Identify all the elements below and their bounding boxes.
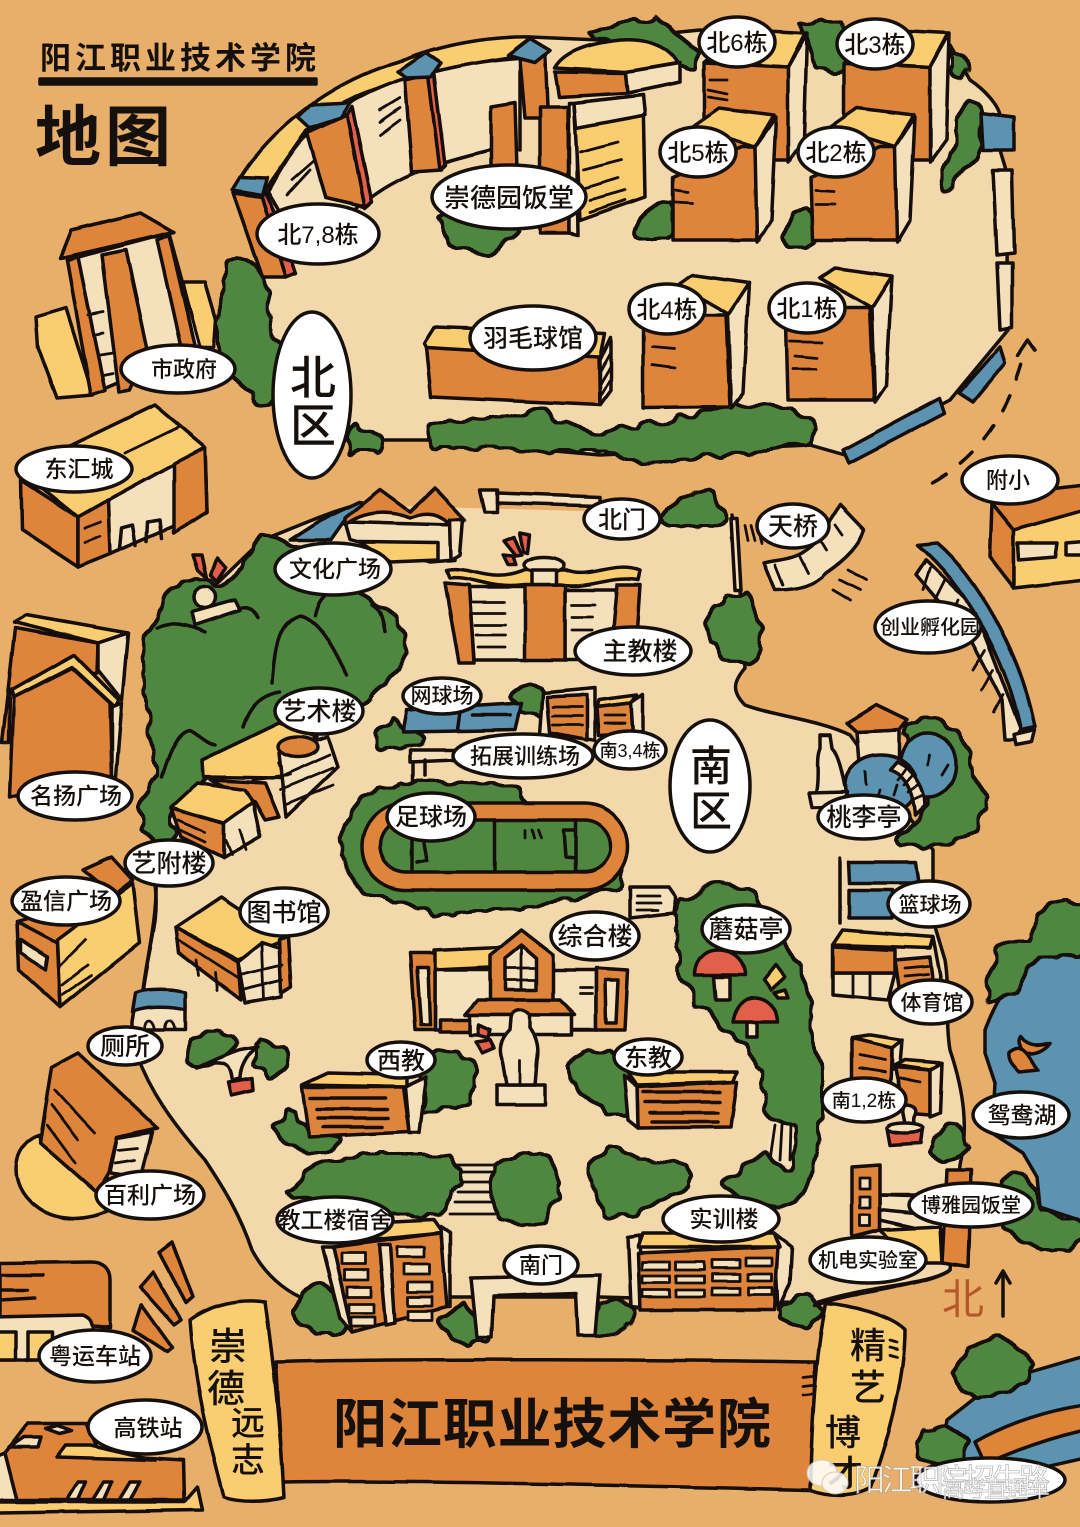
training building [628, 1233, 792, 1310]
label: 名扬广场 [18, 772, 132, 820]
label: 图书馆: 图书馆 [246, 899, 322, 927]
label: 东汇城: 东汇城 [44, 456, 114, 482]
bush: left of north 2 [778, 208, 816, 248]
label: 崇德园饭堂 [432, 165, 586, 229]
Yingxin plaza [17, 857, 140, 1007]
bush: right of north 3 [950, 47, 973, 80]
mushroom pavilions [695, 950, 788, 1037]
watermark: 阳江职院招生路 [854, 1463, 1050, 1498]
sign text: 远志: 远 [231, 1405, 265, 1443]
bush: east classroom [568, 1048, 630, 1117]
title: 阳江职业技术学院 [40, 41, 316, 76]
watermark: 高考直通车 [942, 1476, 1050, 1502]
label: 南区: 南 [690, 743, 732, 790]
main teaching building [445, 533, 640, 663]
dashed arrow to primary school [933, 357, 1023, 483]
label: 北7,8栋: 北7,8栋 [277, 222, 359, 249]
label: 北4栋: 北4栋 [636, 297, 698, 324]
label: 北1栋: 北1栋 [776, 296, 838, 323]
sign text: 博才: 才 [827, 1453, 863, 1494]
bush: mushroom pavilion grove [673, 880, 821, 1207]
arrow head [1018, 340, 1035, 355]
label: 厕所 [88, 1027, 162, 1065]
road west edge stub [143, 885, 156, 990]
wechat icon [807, 1460, 848, 1494]
tree and pot left [197, 1047, 258, 1095]
tower D [508, 38, 550, 118]
label: 北区: 北 [290, 352, 336, 404]
label: 北区 [273, 312, 351, 478]
canteen block rear [555, 40, 680, 97]
label: 南门 [504, 1246, 578, 1284]
label: 文化广场 [275, 543, 391, 595]
label: 足球场: 足球场 [395, 804, 467, 831]
label: 北1栋 [769, 283, 845, 333]
label: 西教: 西教 [377, 1048, 425, 1075]
label: 教工楼宿舍 [277, 1197, 393, 1243]
general building [410, 930, 628, 1035]
sign text: 精艺 [850, 1325, 886, 1408]
bush: below canteen [438, 213, 517, 257]
canteen block front [574, 95, 645, 220]
north arrow [942, 1271, 1010, 1323]
label: 百利广场: 百利广场 [104, 1182, 196, 1208]
label: 实训楼 [663, 1196, 779, 1242]
north campus ground [240, 30, 1008, 455]
label: 主教楼 [575, 627, 691, 675]
Donghui city [20, 405, 207, 567]
lake: 鸳鸯湖 [985, 953, 1080, 1222]
label: 北7,8栋 [257, 204, 379, 264]
dorm: north 3 [844, 30, 949, 162]
label: 体育馆 [890, 980, 972, 1024]
bush: west classroom right [424, 1048, 479, 1113]
road barriers north-east [843, 113, 1014, 463]
label: 北2栋 [798, 127, 874, 177]
sign text: 精艺: 艺 [850, 1367, 886, 1408]
south gate [471, 1275, 600, 1337]
label: 创业孵化园: 创业孵化园 [880, 616, 980, 639]
label: 羽毛球馆 [470, 306, 596, 370]
sign text: 远志: 志 [231, 1442, 265, 1480]
small block near field [630, 887, 676, 918]
staff dorm [322, 1220, 450, 1332]
incubation park [916, 543, 1035, 745]
bush: long south of badminton [426, 411, 604, 452]
label: 综合楼 [551, 912, 639, 960]
label: 体育馆: 体育馆 [900, 992, 964, 1015]
label: 鸳鸯湖: 鸳鸯湖 [988, 1102, 1056, 1128]
bush: north-west [215, 258, 285, 410]
label: 天桥: 天桥 [768, 513, 818, 541]
bush: left of canteen [930, 1123, 968, 1163]
label: bottom-right hidden ellipse [915, 1458, 1065, 1502]
label: 足球场 [387, 793, 475, 841]
label: 南3,4栋: 南3,4栋 [599, 741, 661, 761]
hill with trees [141, 533, 409, 847]
sign text: 博才: 博 [825, 1412, 861, 1453]
tennis court [403, 703, 521, 732]
label: 东汇城 [16, 446, 132, 492]
library [176, 897, 291, 1003]
training bench [410, 750, 455, 780]
sign text: 崇德 [207, 1327, 247, 1411]
label: 名扬广场: 名扬广场 [30, 783, 122, 809]
steps south [450, 1165, 505, 1214]
bush: tennis left [376, 718, 428, 750]
Baili plaza [16, 1053, 157, 1218]
bush: south of overpass road [705, 593, 761, 667]
art annex [171, 783, 260, 858]
label: 艺附楼: 艺附楼 [131, 850, 207, 878]
bush: south right [588, 1147, 693, 1220]
label: 盈信广场 [12, 877, 120, 925]
bush: pavilion rear [902, 715, 976, 800]
north gate [480, 490, 741, 590]
lakes [940, 953, 1080, 1475]
label: 艺附楼 [125, 840, 213, 886]
watermark [807, 1460, 1050, 1502]
label: 艺术楼: 艺术楼 [281, 698, 357, 726]
ducks on lake [1009, 1037, 1050, 1072]
primary school [990, 485, 1080, 588]
label: 机电实验室: 机电实验室 [818, 1249, 918, 1272]
bush: right of training [778, 1293, 824, 1328]
label: 北3栋: 北3栋 [844, 32, 906, 59]
label: 实训楼: 实训楼 [690, 1206, 758, 1232]
bush: south long left [286, 1155, 462, 1215]
label: 文化广场: 文化广场 [289, 556, 381, 582]
banner base [276, 1360, 815, 1490]
label: 机电实验室 [810, 1237, 926, 1283]
canteen towers [491, 103, 578, 235]
heading: map: 地图 [35, 100, 171, 174]
label: 高铁站: 高铁站 [114, 1415, 182, 1441]
label: 附小: 附小 [986, 468, 1030, 493]
south 3,4 blocks [540, 688, 643, 740]
bush: left of staff dorm [291, 1282, 348, 1338]
orange bridge over pond [975, 1405, 1080, 1464]
bush: north gate [658, 490, 728, 527]
label: 南门: 南门 [519, 1253, 563, 1278]
label: 高铁站 [88, 1400, 202, 1454]
bush: left of north 5 [630, 200, 673, 238]
label: 博雅园饭堂 [909, 1183, 1033, 1227]
bush: long south of north 4 [605, 405, 816, 463]
toilet block [132, 989, 185, 1030]
label: 北2栋: 北2栋 [805, 140, 867, 167]
label: 北5栋 [660, 127, 736, 177]
culture plaza tent [290, 488, 465, 562]
left stone sign [190, 1301, 284, 1501]
north dorm arc band [240, 37, 530, 230]
label: 市政府 [121, 345, 235, 393]
bush: between north 6 and 3 [797, 23, 843, 73]
road to lab [815, 1270, 950, 1305]
label: 篮球场: 篮球场 [898, 894, 962, 917]
sign text: 崇德: 崇 [209, 1327, 247, 1369]
bush: south centre [490, 1150, 557, 1227]
green-side steps [764, 1120, 800, 1165]
label: 拓展训练场: 拓展训练场 [470, 744, 580, 769]
label: 博雅园饭堂: 博雅园饭堂 [921, 1194, 1021, 1217]
label: 主教楼: 主教楼 [602, 638, 678, 666]
scholar statue [809, 735, 847, 808]
label: 教工楼宿舍: 教工楼宿舍 [278, 1207, 392, 1233]
label: 北3栋 [837, 19, 913, 69]
sign text: 博才 [825, 1412, 863, 1494]
sign text: 崇德: 德 [207, 1369, 245, 1411]
dorm: north 6 [704, 30, 807, 162]
sign text: 远志 [231, 1405, 265, 1480]
label: 北门 [584, 499, 660, 539]
label: 网球场: 网球场 [410, 685, 474, 708]
station burst [133, 1242, 193, 1352]
dorm: north 5 [673, 108, 776, 242]
label: 东教 [614, 1039, 682, 1075]
gymnasium [833, 930, 945, 1000]
right stone sign [810, 1303, 905, 1495]
label: 南区: 区 [690, 788, 732, 835]
bush: south-east lower [916, 1423, 971, 1467]
label: 天桥 [757, 504, 829, 548]
label: 网球场 [403, 678, 481, 714]
label: 盈信广场: 盈信广场 [20, 888, 112, 914]
bush: near blue gate [938, 100, 983, 193]
label: 羽毛球馆: 羽毛球馆 [483, 325, 583, 353]
bush: pavilion front [892, 780, 988, 850]
label: 北6栋 [699, 17, 775, 67]
bush: north top [587, 15, 699, 72]
south campus ground [137, 505, 964, 1303]
dorm: north 2 [811, 108, 915, 242]
label: 创业孵化园 [875, 601, 981, 653]
bush: right of staff dorm [438, 1303, 490, 1345]
label: 拓展训练场 [453, 734, 593, 778]
label: 图书馆 [240, 888, 328, 936]
label: 崇德园饭堂: 崇德园饭堂 [444, 183, 574, 213]
label: 桃李亭 [818, 795, 910, 839]
statue [476, 1010, 545, 1105]
football field [362, 803, 628, 890]
label: 北门: 北门 [598, 507, 646, 534]
label: 厕所: 厕所 [100, 1033, 150, 1061]
label: 粤运车站 [39, 1330, 151, 1382]
hill statue [192, 555, 240, 625]
label: 南区 [670, 720, 750, 852]
tower C [398, 53, 445, 172]
basketball courts [840, 858, 919, 923]
label: 西教 [367, 1042, 435, 1078]
label: 南3,4栋 [594, 731, 666, 769]
label: 东教: 东教 [624, 1045, 672, 1072]
label: 篮球场 [888, 881, 970, 927]
label: 北区: 区 [290, 400, 336, 452]
tower A [232, 177, 296, 277]
Mingyang plaza [2, 615, 128, 797]
label: 附小 [962, 456, 1058, 504]
Boya canteen complex [852, 1165, 971, 1267]
bush: lake north [985, 900, 1080, 1003]
bush: right of gate [592, 1298, 633, 1338]
south 1,2 dorms [852, 1035, 942, 1117]
city government [36, 213, 216, 398]
label: 艺术楼 [275, 688, 363, 734]
banner text: 阳江职业技术学院 [333, 1395, 771, 1455]
north arrow: 北 [942, 1276, 984, 1323]
label: 百利广场 [96, 1171, 204, 1219]
label: 蘑菇亭: 蘑菇亭 [708, 916, 784, 944]
dorm: north 4 [643, 275, 749, 408]
sign text: 精艺: 精 [850, 1325, 886, 1366]
overpass bridge [745, 505, 866, 600]
high speed train [0, 1423, 202, 1513]
tree left [183, 1030, 241, 1067]
bush: beside north zone label [348, 425, 383, 452]
art building [202, 723, 338, 820]
dorm: north 1 [786, 268, 892, 402]
fountain [887, 1105, 923, 1145]
label: 北5栋: 北5栋 [667, 140, 729, 167]
bush: field surround [340, 780, 624, 915]
label: 北4栋 [629, 284, 705, 334]
label: 桃李亭: 桃李亭 [826, 804, 902, 832]
bush: west classroom left [271, 1108, 341, 1153]
label: 综合楼: 综合楼 [557, 923, 633, 951]
east classroom [624, 1072, 737, 1128]
label: 粤运车站: 粤运车站 [49, 1343, 141, 1369]
bush: tennis right [510, 682, 548, 720]
bush: lake south [1002, 1170, 1080, 1250]
badminton hall [424, 327, 611, 405]
label: 蘑菇亭 [702, 905, 790, 953]
label: 市政府: 市政府 [151, 357, 217, 382]
bush: above training building [721, 1153, 795, 1208]
lake: south-east pond [940, 1356, 1080, 1475]
label: 北6栋: 北6栋 [706, 30, 768, 57]
west classroom [302, 1073, 426, 1137]
bush: south-east upper [949, 1333, 1037, 1398]
label: 南1,2栋 [822, 1078, 906, 1122]
Yueyun station [0, 1262, 110, 1360]
peach-plum pavilion [845, 705, 956, 815]
label: 南1,2栋: 南1,2栋 [832, 1090, 896, 1112]
label: 鸳鸯湖 [973, 1092, 1069, 1138]
tower B [298, 103, 372, 208]
tree right [255, 1040, 290, 1078]
hill ridge lines [157, 592, 385, 777]
